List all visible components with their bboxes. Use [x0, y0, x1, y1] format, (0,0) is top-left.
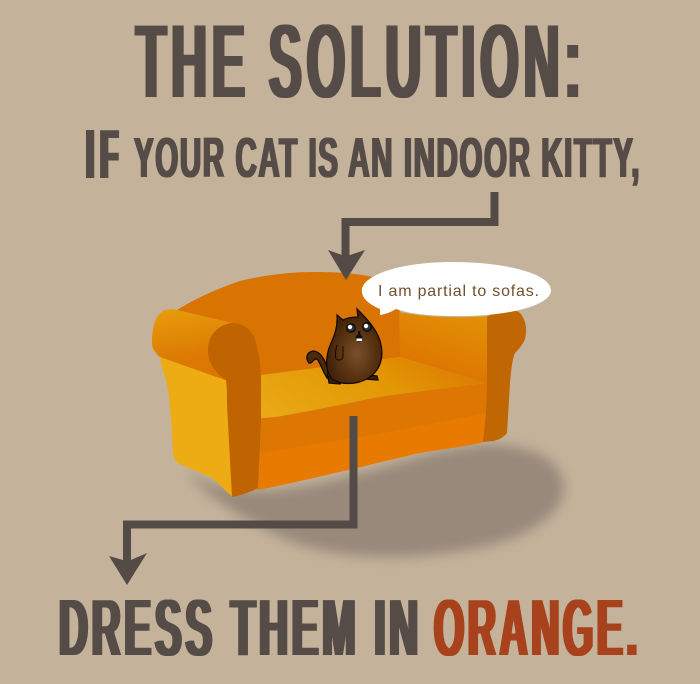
subtitle: if your cat is an indoor kitty — [86, 115, 641, 193]
sofa — [152, 272, 526, 497]
cat — [307, 309, 382, 384]
cat eyes — [347, 323, 371, 332]
left arm front — [208, 323, 261, 497]
cat nose — [358, 331, 360, 334]
seat cushion front — [259, 383, 488, 454]
sofa base front — [257, 413, 486, 490]
left arm top — [152, 309, 240, 381]
left side panel — [160, 357, 233, 497]
right arm — [483, 310, 526, 442]
arrow: top — [328, 192, 494, 280]
sofa back — [177, 272, 401, 376]
cat feet — [328, 375, 378, 384]
speech bubble — [362, 262, 551, 316]
cat arm — [335, 345, 343, 360]
seat cushion top — [259, 357, 488, 419]
sofa shadow — [185, 445, 564, 557]
right backrest — [399, 312, 488, 384]
subtitle: if your cat is an indoor kitty: IF — [86, 115, 124, 193]
arrow: bottom — [109, 416, 354, 585]
cat mouth — [356, 334, 362, 342]
cat tail — [307, 351, 328, 378]
cat body — [327, 309, 382, 384]
speech text: I am partial to sofas. — [378, 283, 539, 300]
